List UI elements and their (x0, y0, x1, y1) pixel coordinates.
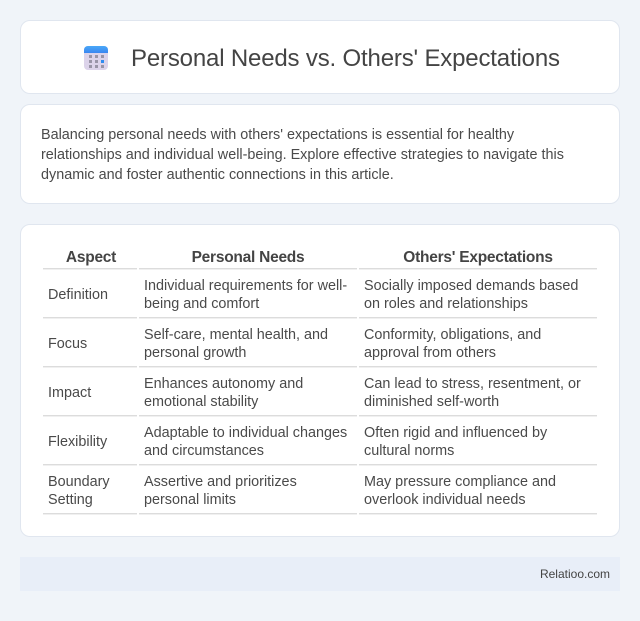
table rows: approval from others (364, 345, 496, 361)
table rows: Conformity, obligations, and (364, 327, 541, 343)
table rows: emotional stability (144, 394, 258, 410)
table rows: diminished self-worth (364, 394, 499, 410)
table rows: Definition (48, 287, 108, 303)
table rows: May pressure compliance and (364, 474, 556, 490)
table rows: Setting (48, 492, 93, 508)
table rows (43, 268, 597, 515)
table rows: Enhances autonomy and (144, 376, 303, 392)
text block: intro paragraph: Balancing personal needs with others' expectations is essential for healthy (41, 127, 514, 143)
table headers (66, 249, 553, 266)
table rows: personal growth (144, 345, 246, 361)
table headers: Aspect (66, 249, 116, 266)
table rows: Often rigid and influenced by (364, 425, 547, 441)
text block: intro paragraph (41, 127, 564, 183)
table rows: being and comfort (144, 296, 259, 312)
table headers: Others' Expectations (403, 249, 553, 266)
table rows: Boundary (48, 474, 110, 490)
table rows: personal limits (144, 492, 236, 508)
table rows: Can lead to stress, resentment, or (364, 376, 581, 392)
title: Personal Needs vs. Others' Expectations (131, 45, 560, 72)
table rows: overlook individual needs (364, 492, 526, 508)
icon: calendar (84, 46, 108, 70)
panel: comparison table (20, 224, 620, 537)
table rows: and circumstances (144, 443, 264, 459)
text block: intro paragraph: dynamic and foster authentic connections in this article. (41, 167, 394, 183)
table rows: Impact (48, 385, 91, 401)
text block: intro paragraph: relationships and individual well-being. Explore effective strategies to navigate this (41, 147, 564, 163)
table rows: on roles and relationships (364, 296, 528, 312)
table headers: Personal Needs (192, 249, 304, 266)
table rows: Adaptable to individual changes (144, 425, 347, 441)
table rows: Flexibility (48, 434, 107, 450)
panel: title card (20, 20, 620, 94)
table rows: Self-care, mental health, and (144, 327, 328, 343)
footer text: Relatioo.com (540, 567, 610, 581)
table rows: Socially imposed demands based (364, 278, 578, 294)
table rows: Focus (48, 336, 87, 352)
table rows: Individual requirements for well- (144, 278, 347, 294)
table rows: cultural norms (364, 443, 454, 459)
table rows: Assertive and prioritizes (144, 474, 297, 490)
footer bar (20, 557, 620, 591)
panel: introduction (20, 104, 620, 204)
